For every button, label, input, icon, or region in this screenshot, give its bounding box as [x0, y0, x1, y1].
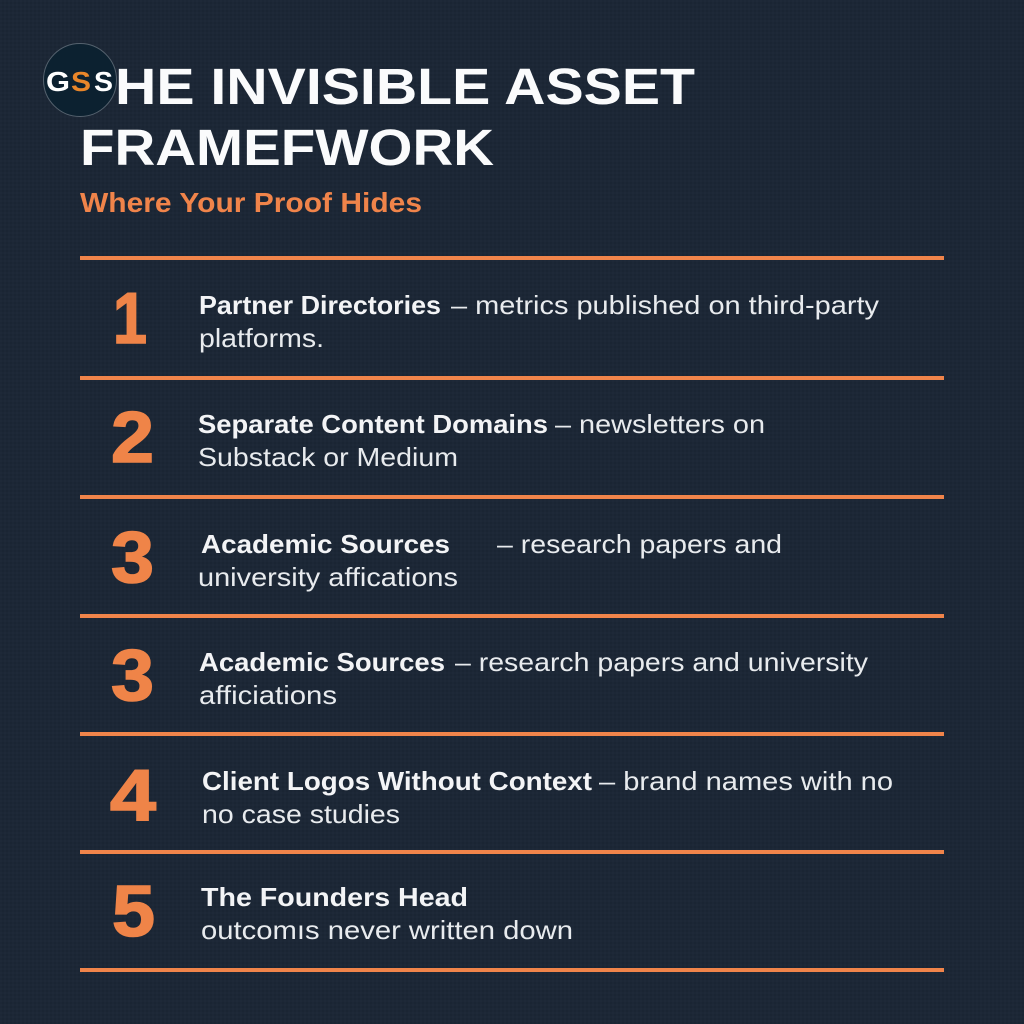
title: THE INVISIBLE ASSET — [80, 58, 695, 115]
divider lines — [80, 256, 944, 972]
logo badge: GSS: S — [94, 66, 113, 97]
row 3: academic sources: – research papers and — [497, 529, 782, 559]
row 2: separate content domains: Separate Content Domains — [198, 409, 548, 439]
logo badge: GSS: S — [71, 66, 91, 97]
row 5: client logos: – brand names with no — [599, 766, 893, 796]
row 4: academic sources repeat: 3 — [111, 636, 154, 716]
row 5: client logos: 4 — [110, 756, 156, 836]
row 1: partner directories: platforms. — [199, 323, 324, 353]
logo badge: GSS: G — [46, 66, 70, 97]
row 3: academic sources — [111, 518, 782, 598]
row 6: the founders head: 5 — [112, 872, 155, 952]
row 5: client logos: no case studies — [202, 799, 400, 829]
row 6: the founders head: The Founders Head — [201, 882, 468, 912]
row 1: partner directories — [113, 279, 879, 359]
row 4: academic sources repeat: – research papers and university — [455, 647, 868, 677]
logo badge: GSS — [44, 44, 116, 116]
row 3: academic sources: university affications — [198, 562, 458, 592]
row 5: client logos — [110, 756, 893, 836]
row 1: partner directories: 1 — [113, 279, 147, 359]
row 6: the founders head — [112, 872, 573, 952]
row 4: academic sources repeat: Academic Sources — [199, 647, 445, 677]
title: FRAMEFWORK — [80, 119, 494, 176]
title — [80, 58, 695, 176]
row 2: separate content domains: 2 — [111, 398, 154, 478]
row 1: partner directories: Partner Directories — [199, 290, 441, 320]
row 4: academic sources repeat: afficiations — [199, 680, 337, 710]
row 6: the founders head: outcomıs never written down — [201, 915, 573, 945]
row 1: partner directories: – metrics published on third-party — [451, 290, 879, 320]
row 4: academic sources repeat — [111, 636, 868, 716]
row 2: separate content domains: Substack or Medium — [198, 442, 458, 472]
row 5: client logos: Client Logos Without Context — [202, 766, 592, 796]
row 3: academic sources: Academic Sources — [201, 529, 450, 559]
row 2: separate content domains — [111, 398, 765, 478]
row 3: academic sources: 3 — [111, 518, 154, 598]
subtitle: Where Your Proof Hides — [80, 187, 422, 218]
row 2: separate content domains: – newsletters on — [555, 409, 765, 439]
